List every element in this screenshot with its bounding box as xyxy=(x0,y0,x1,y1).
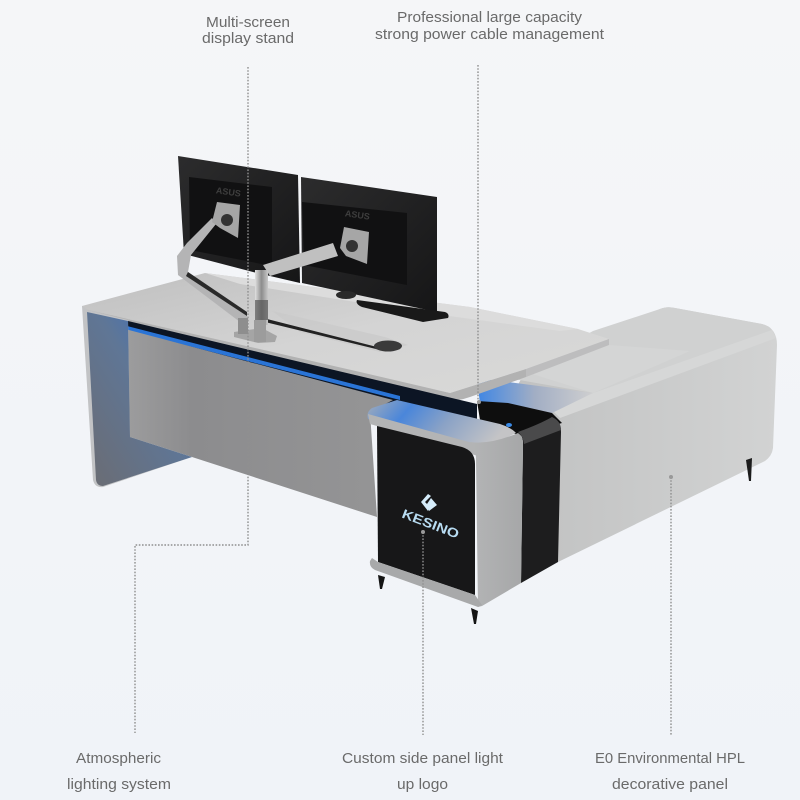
front modesty panel with light strip xyxy=(125,321,477,517)
right monitor xyxy=(301,177,437,312)
monitor foot xyxy=(336,291,356,299)
pedestal base plate xyxy=(370,558,482,607)
black band xyxy=(518,417,561,583)
desktop surface xyxy=(82,273,609,401)
keyboard xyxy=(357,300,449,322)
monitors xyxy=(178,156,437,312)
black logo panel xyxy=(377,426,475,595)
label: side panel logo: Custom side panel light xyxy=(342,751,503,767)
right arm xyxy=(263,243,338,276)
label: cable management xyxy=(375,10,604,43)
label: HPL decorative panel xyxy=(595,751,745,793)
arm pole xyxy=(255,270,268,325)
label: multi-screen display stand: Multi-screen xyxy=(206,15,290,31)
KESINO logo: KESINO xyxy=(400,506,461,542)
left VESA bracket xyxy=(212,202,240,238)
right return cabinet xyxy=(508,307,777,562)
pedestal top surface xyxy=(368,400,516,452)
desk front lip xyxy=(84,309,526,401)
pedestal silver side xyxy=(470,433,523,607)
right monitor brand: ASUS xyxy=(344,208,370,222)
label: cable management: Professional large capacity xyxy=(397,10,583,26)
callout leader: multi-screen and lighting xyxy=(135,67,248,733)
KESINO logo xyxy=(400,494,461,542)
label: HPL decorative panel: E0 Environmental HPL xyxy=(595,751,745,767)
blue glow behind pedestal xyxy=(477,378,593,413)
label: lighting system: Atmospheric xyxy=(76,751,161,767)
label: cable management: strong power cable management xyxy=(375,27,604,43)
label: lighting system: lighting system xyxy=(67,777,171,793)
callout leader: HPL panel xyxy=(669,475,673,735)
cabinet legs xyxy=(746,458,752,481)
callout leader: side logo xyxy=(421,530,425,735)
side pedestal xyxy=(368,400,562,624)
label: multi-screen display stand xyxy=(202,15,294,47)
left monitor xyxy=(178,156,300,283)
label: HPL decorative panel: decorative panel xyxy=(612,777,728,793)
clamp base xyxy=(234,328,277,343)
callout leader: cable management xyxy=(477,65,481,404)
pedestal legs xyxy=(378,575,385,589)
cable tray and grommet xyxy=(265,311,408,352)
blue light spot xyxy=(506,423,512,427)
right VESA bracket xyxy=(340,227,369,264)
label: side panel logo: up logo xyxy=(397,777,448,793)
label: side panel logo xyxy=(342,751,503,793)
monitor arms xyxy=(177,202,369,343)
left monitor brand: ASUS xyxy=(215,185,241,199)
label: multi-screen display stand: display stand xyxy=(202,31,294,47)
left leg panel xyxy=(82,306,192,487)
label: lighting system xyxy=(67,751,171,793)
cavity above pedestal xyxy=(477,401,562,436)
left arm xyxy=(177,218,247,322)
